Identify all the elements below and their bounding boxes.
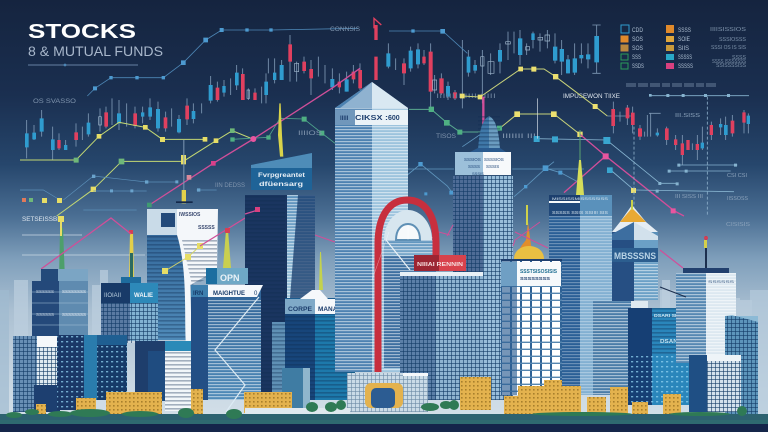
trees and low plaza <box>0 400 768 421</box>
building: IRM tower <box>191 268 263 412</box>
legend: IIIISISSIOS <box>710 27 747 33</box>
building: navy tower with sign: Fvrpgreantet <box>258 172 306 179</box>
distant pale skyline <box>0 270 768 420</box>
blue lines near towers <box>382 132 584 197</box>
building: sign blue tower <box>101 277 158 343</box>
blue bodies <box>25 65 349 150</box>
building: right low glass blocks <box>689 315 758 415</box>
pink line <box>147 68 360 207</box>
left small label and markers <box>22 198 145 255</box>
pink line: left cluster <box>41 218 131 269</box>
legend: SSSS <box>678 28 691 34</box>
pinnacle: gold mast over tower <box>278 103 283 157</box>
legend <box>621 25 747 70</box>
vertical dashed lines <box>634 97 707 216</box>
mast: centre left <box>176 140 193 203</box>
legend: SSSS <box>732 55 747 61</box>
title: 8 & MUTUAL FUNDS <box>28 43 163 59</box>
sign: red banner: NIIIAI RENNIN <box>417 262 464 268</box>
candlestick chart: left and centre <box>20 18 381 160</box>
small labels on chart: IIN DEDSS <box>215 183 245 189</box>
building: far right block <box>593 301 689 405</box>
small labels on chart <box>33 27 620 189</box>
building: right tall tower: SSSSSS <box>708 279 735 284</box>
building: central glass tower: 600 <box>388 115 400 122</box>
building: corporate block: MANARGT <box>318 306 351 313</box>
building: white curved tower <box>147 209 258 345</box>
text: right-hand labels: III SISS III <box>675 194 704 200</box>
legend: SOS <box>632 37 643 43</box>
building: white-band left tower: SSSSSSSS <box>62 289 86 294</box>
building: far right block: DSANU. <box>660 339 685 345</box>
sign: red banner <box>414 255 466 271</box>
gold low-rise buildings <box>36 377 681 416</box>
building: blue tower with dome: SSSIOS <box>464 157 481 162</box>
legend: SSSSS <box>678 55 692 61</box>
building: white-band left tower <box>32 269 88 341</box>
blue line top <box>389 29 467 53</box>
building: blue tower with dome <box>420 116 513 400</box>
building: IRM tower: 0 <box>254 291 258 297</box>
yellow line upper <box>460 67 607 116</box>
hollow bodies <box>99 63 299 125</box>
legend: SSS <box>632 55 641 61</box>
legend: SIIS <box>678 46 689 52</box>
legend: SSISSSSISS <box>716 63 747 69</box>
title <box>28 21 163 66</box>
small blue line lower left <box>20 176 217 210</box>
building: corporate block: CORPE <box>288 306 313 313</box>
green yellow line mid <box>409 107 583 137</box>
building: blue tower with dome: SSSIS <box>486 164 499 169</box>
legend: SSSS ISSSSSSS <box>712 59 747 65</box>
line charts: right <box>382 29 749 216</box>
building: gold dome tower <box>501 205 562 395</box>
building: stripe tower right of centre <box>612 200 658 302</box>
building: slab tower <box>549 130 612 395</box>
building: central glass tower: CIKSX : <box>355 115 388 122</box>
title: STOCKS <box>28 21 136 43</box>
small labels on chart: IIIIIIIIIIIII IIIII <box>436 94 497 100</box>
building: blue tower with dome: SSSIS <box>472 171 484 176</box>
candlestick chart: far right <box>607 102 750 165</box>
legend: SOIE <box>678 37 690 43</box>
pink line descending <box>483 97 684 216</box>
base band <box>0 424 768 432</box>
building: IRM tower: MAIGHTUE <box>213 290 246 297</box>
small labels on chart: IIIIOS <box>298 131 322 137</box>
ground strip <box>0 420 768 424</box>
red bodies <box>57 25 378 148</box>
legend: SSSSS <box>678 64 693 70</box>
building: gold dome tower: SSSSSSSS <box>520 276 550 281</box>
text: right-hand labels <box>626 83 750 228</box>
building: sign blue tower: IIOIAII <box>104 293 121 299</box>
big arrow flag <box>374 18 381 28</box>
building: IRM tower: IRN <box>193 291 203 297</box>
yellow-green line 1 <box>20 122 253 216</box>
small labels on chart: TISOS <box>436 134 456 140</box>
green line <box>230 117 335 143</box>
building: white-band left tower: SSSSSS <box>36 312 54 317</box>
text: right-hand labels: IISSOSS <box>727 196 748 202</box>
small labels on chart: OS SVASSO <box>33 99 76 105</box>
text: right-hand labels: CSI CSI <box>727 173 747 179</box>
small labels on chart: IIIIIII III <box>502 134 537 140</box>
wicks <box>20 35 360 160</box>
building: front left block row <box>13 335 203 412</box>
building: central plaza with gold emblem <box>347 373 428 412</box>
building: slab tower: MISSISSMISSSSSISS <box>552 196 608 201</box>
building: white-band left tower: SSSSSS <box>36 289 54 294</box>
small labels on chart: CONNSIS <box>330 27 360 33</box>
legend: SSDS <box>632 64 644 70</box>
building: blue tower with dome: SSSSIOS <box>484 157 504 162</box>
legend: SOS <box>632 46 643 52</box>
tower: mast left cluster <box>59 216 134 280</box>
legend: SSSIOSSS <box>719 37 747 43</box>
building: corporate block <box>272 252 355 408</box>
building: IRM tower: OPN <box>220 273 240 283</box>
building: navy tower with sign <box>245 153 335 400</box>
building: white curved tower: IWSSIOS <box>179 212 201 218</box>
text: right-hand labels: IIIII IIIII IIIII IIII IIIII IIIII IIII IIIII <box>626 83 717 89</box>
building: central glass tower: IIIII <box>340 116 349 122</box>
building: stripe tower right of centre: MBSSSNS <box>614 251 656 261</box>
teal line <box>534 94 749 193</box>
building: central glass tower <box>335 82 408 372</box>
line charts: left <box>20 28 360 216</box>
building: far right block: DSARI SEUR <box>654 313 687 318</box>
legend: CDD <box>632 28 644 34</box>
text: right-hand labels: CISISIS <box>726 222 750 228</box>
small labels on chart: IMPUSEWON TIIXE <box>563 94 620 100</box>
blue trend line top <box>87 28 358 96</box>
building: arch tower <box>372 200 436 372</box>
building: low glass under arch <box>400 272 483 400</box>
building: right tall tower <box>660 236 736 363</box>
building: gold dome tower: SSSTSISOSISIS <box>520 269 558 275</box>
candlestick chart: upper right centre <box>386 25 601 110</box>
building: white curved tower: SSSSS <box>198 225 215 231</box>
building: white-band left tower: SSSSSSSS <box>62 312 86 317</box>
building: blue tower with dome: SSSS <box>468 164 480 169</box>
legend: SSSI OS IS SIS <box>711 45 747 51</box>
building: navy tower with sign: dfüensarg <box>259 181 303 188</box>
text: right-hand labels: III.SISS <box>675 113 700 119</box>
building: slab tower: SSSSS SSIS SSIIII SIS <box>552 210 608 215</box>
left small label and markers: SETSEISSBI <box>22 217 59 223</box>
building: sign blue tower: WALIE <box>134 293 153 299</box>
